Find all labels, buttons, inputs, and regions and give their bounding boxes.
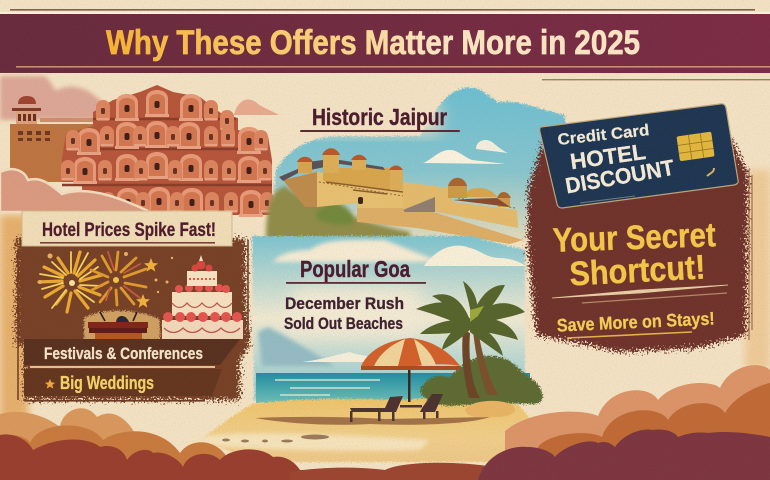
pink clouds behind palace	[0, 76, 279, 120]
beach shadow	[255, 417, 490, 425]
pink cloud front of palace	[0, 169, 150, 212]
panel: left brown events	[16, 238, 250, 402]
beach sand	[200, 398, 540, 462]
dune: deep centre	[290, 463, 495, 480]
icon: star	[136, 294, 150, 308]
icon: podium	[88, 312, 148, 340]
heading: Historic Jaipur: Historic Jaipur	[312, 104, 447, 130]
text: festivals and conferences: Festivals & Conferences	[44, 344, 203, 363]
title banner	[0, 14, 770, 73]
bottom dunes	[0, 365, 770, 480]
text: december rush: December Rush	[285, 294, 404, 313]
confetti dots	[38, 252, 173, 293]
heading: your secret: Your Secret	[552, 216, 716, 260]
dune: light layer left	[0, 408, 150, 480]
right sand wash	[745, 170, 770, 370]
pale sand strip	[190, 434, 430, 451]
illustration: Hawa Mahal and fort	[10, 85, 274, 217]
icon: wedding cake	[162, 255, 243, 339]
fort wall	[10, 124, 95, 182]
dune: mid layer right	[538, 383, 770, 480]
fort	[279, 148, 523, 244]
fort terraces	[357, 203, 523, 244]
icon: sun loungers	[350, 394, 443, 422]
bar: big weddings	[24, 369, 222, 396]
icon: bushes	[420, 356, 543, 406]
icon: fireworks right	[91, 252, 146, 305]
icon: fireworks left	[39, 252, 102, 312]
fort main wall	[317, 172, 403, 208]
palace third row niches	[115, 154, 139, 181]
palace second row niches	[115, 122, 139, 149]
fort left wall	[283, 172, 317, 207]
icon: beach umbrella	[361, 338, 460, 402]
dune: deep left	[0, 434, 385, 480]
fort roof	[279, 160, 385, 181]
text: save more on stays: Save More on Stays!	[556, 308, 715, 336]
text: big weddings: Big Weddings	[60, 373, 154, 393]
panel: Historic Jaipur	[266, 88, 565, 244]
footprints	[222, 434, 329, 442]
palace fourth row niches	[116, 188, 140, 215]
top decorative lines	[0, 9, 770, 14]
mountain	[258, 327, 335, 366]
text: hotel: HOTEL	[569, 139, 647, 174]
clouds	[272, 240, 440, 264]
fort towers	[298, 162, 312, 173]
greenery	[266, 186, 410, 240]
heading: Popular Goa: Popular Goa	[300, 256, 410, 282]
card: credit card hotel discount	[540, 104, 738, 208]
fort upper block	[323, 168, 390, 190]
bar: festivals	[24, 339, 240, 365]
text: hotel prices spike fast: Hotel Prices Spike Fast!	[42, 220, 216, 241]
text: credit card: Credit Card	[557, 122, 650, 149]
panel: right brown	[528, 135, 752, 352]
icon: chip	[676, 132, 715, 161]
sky	[252, 236, 525, 400]
sea	[256, 373, 530, 403]
palace silhouette	[62, 85, 272, 215]
fort domes	[297, 157, 313, 162]
text: discount: DISCOUNT	[563, 155, 677, 198]
palace row dividers	[62, 119, 272, 185]
dune: maroon right	[478, 429, 770, 480]
label: hotel prices	[22, 211, 232, 246]
tower	[18, 96, 36, 104]
palace top row niches	[115, 94, 139, 121]
icon: star bullet	[45, 379, 55, 389]
left sand wash	[0, 215, 30, 420]
heading background fade	[300, 105, 440, 133]
sand mound	[465, 401, 515, 417]
heading: shortcut: Shortcut!	[569, 248, 706, 293]
fort right wall	[403, 182, 518, 228]
title: Why These Offers Matter More in 2025	[106, 24, 640, 62]
sky	[270, 88, 565, 240]
text: sold out beaches: Sold Out Beaches	[284, 315, 403, 333]
clouds	[423, 150, 505, 164]
panel: Popular Goa	[252, 236, 530, 403]
dune: mid layer left	[0, 425, 240, 480]
dune: light layer right	[505, 365, 770, 480]
icon: star	[144, 258, 158, 272]
fort shadow	[403, 197, 435, 212]
icon: palm trees	[416, 281, 525, 398]
